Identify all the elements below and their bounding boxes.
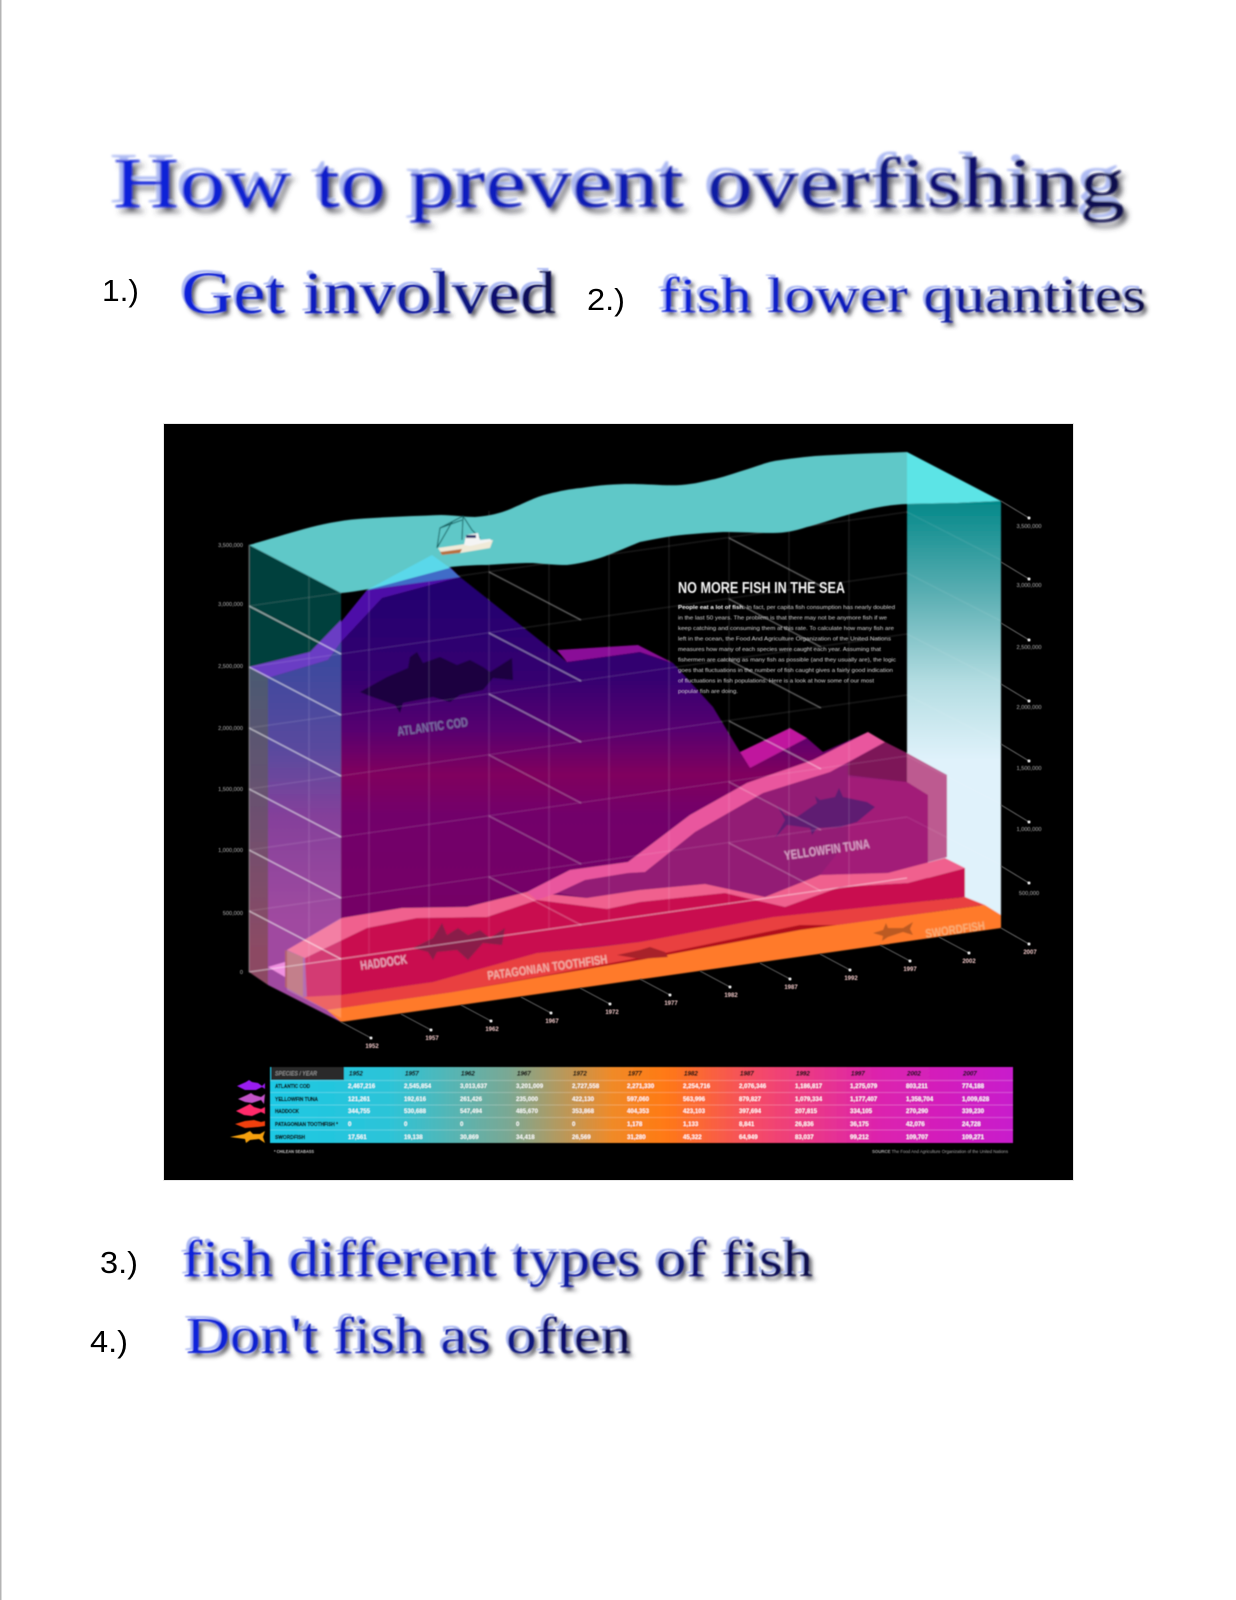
row: atlantic cod: ATLANTIC COD <box>275 1084 310 1090</box>
right wall <box>907 501 1001 916</box>
text block: no more fish in the sea: keep catching and consuming them at this rate. To calculate how many fish are <box>678 626 894 632</box>
left axis labels <box>218 543 243 976</box>
row: haddock: 334,105 <box>850 1108 873 1115</box>
tip 1 text: Get involved <box>181 260 556 326</box>
data table: 1967 <box>517 1070 531 1078</box>
row: swordfish: 83,037 <box>795 1134 814 1141</box>
row: haddock: 423,103 <box>683 1108 706 1115</box>
data table: 1952 <box>349 1070 363 1078</box>
fish: swordfish <box>873 922 913 941</box>
tip 1 number: 1.) <box>102 273 139 308</box>
year axis: 1957 <box>425 1036 439 1042</box>
3D chart <box>249 452 1001 1022</box>
left axis labels: 3,000,000 <box>218 602 243 608</box>
row: patagonian toothfish <box>275 1121 981 1128</box>
data table: 1992 <box>796 1070 810 1078</box>
row: haddock: 344,755 <box>348 1108 371 1115</box>
grid lines <box>249 460 1001 972</box>
row: patagonian toothfish: 1,178 <box>627 1121 643 1128</box>
row: patagonian toothfish: 0 <box>460 1121 464 1128</box>
right axis ticks and labels: 1,000,000 <box>1017 827 1041 833</box>
row: atlantic cod: 2,254,716 <box>683 1083 711 1090</box>
row: patagonian toothfish: 1,133 <box>683 1121 699 1128</box>
year axis: 1952 <box>365 1044 379 1050</box>
data table: 2002 <box>906 1070 921 1078</box>
right axis ticks and labels: 2,500,000 <box>1017 645 1041 651</box>
right axis ticks and labels: 3,000,000 <box>1017 583 1041 589</box>
year axis: 1972 <box>605 1010 619 1016</box>
row: swordfish: 99,212 <box>850 1134 869 1141</box>
row: yellowfin tuna: 1,177,407 <box>850 1096 878 1103</box>
row: swordfish: 109,271 <box>962 1134 985 1141</box>
row: atlantic cod: 2,545,854 <box>404 1083 432 1090</box>
text block: no more fish in the sea: measures how many of each species were caught each year. Assuming that <box>678 647 882 653</box>
left axis labels: 1,500,000 <box>218 787 243 793</box>
tip 3 number: 3.) <box>100 1245 138 1280</box>
row: yellowfin tuna: 1,009,628 <box>962 1096 990 1103</box>
row: haddock: 485,670 <box>516 1108 539 1115</box>
toothfish band <box>303 897 985 1010</box>
haddock face <box>305 868 965 1000</box>
row: yellowfin tuna: 422,130 <box>572 1096 595 1103</box>
data table: 1982 <box>684 1070 698 1078</box>
row: patagonian toothfish: 42,076 <box>906 1121 925 1128</box>
row: haddock: 547,494 <box>460 1108 483 1115</box>
row: yellowfin tuna <box>275 1096 990 1103</box>
data table <box>270 1067 1013 1143</box>
text block: no more fish in the sea: People eat a lot of fish. In fact, per capita fish consumption has nearly doubled <box>678 605 895 611</box>
row: patagonian toothfish: 0 <box>404 1121 408 1128</box>
data table: 1997 <box>851 1070 865 1078</box>
row: swordfish: 109,707 <box>906 1134 929 1141</box>
row: yellowfin tuna: 121,261 <box>348 1096 371 1103</box>
row: yellowfin tuna: 1,079,334 <box>795 1096 823 1103</box>
tuna face <box>557 742 947 900</box>
year axis: 1982 <box>724 993 738 999</box>
row: yellowfin tuna: 563,996 <box>683 1096 706 1103</box>
tuna top band <box>527 732 885 900</box>
row: swordfish: 45,322 <box>683 1134 702 1141</box>
data table: 1972 <box>573 1070 587 1078</box>
text block: no more fish in the sea: fishermen are catching as many fish as possible (and they usually are), the logic <box>678 658 896 664</box>
water surface <box>249 452 1001 593</box>
left axis labels: 500,000 <box>223 911 243 917</box>
row: patagonian toothfish: PATAGONIAN TOOTHFISH * <box>275 1122 339 1128</box>
row: swordfish: 30,869 <box>460 1134 479 1141</box>
fish: yellowfin tuna <box>775 788 875 838</box>
row: atlantic cod: 2,271,330 <box>627 1083 655 1090</box>
row: swordfish: SWORDFISH <box>275 1135 305 1141</box>
data table: 2007 <box>962 1070 977 1078</box>
data table: 1987 <box>740 1070 754 1078</box>
table footnote: * CHILEAN SEABASS <box>274 1149 314 1154</box>
row: patagonian toothfish: 0 <box>572 1121 576 1128</box>
fish: toothfish <box>617 947 668 959</box>
text block: no more fish in the sea: popular fish are doing. <box>678 689 738 695</box>
label: patagonian toothfish: PATAGONIAN TOOTHFISH <box>486 952 608 983</box>
text block: no more fish in the sea: goes that fluctuations in the number of fish caught gives a fairly good indication <box>678 668 893 674</box>
title: How to prevent overfishing <box>113 143 1125 223</box>
data table: 1977 <box>628 1070 642 1078</box>
right axis ticks and labels: 2,000,000 <box>1017 705 1041 711</box>
row: swordfish: 19,138 <box>404 1134 423 1141</box>
row: yellowfin tuna: 261,426 <box>460 1096 483 1103</box>
row: yellowfin tuna: 1,358,704 <box>906 1096 934 1103</box>
right axis ticks and labels <box>1001 501 1041 944</box>
year axis: 1962 <box>485 1027 499 1033</box>
row: swordfish <box>275 1134 985 1141</box>
label: atlantic cod: ATLANTIC COD <box>396 714 469 739</box>
row: yellowfin tuna: 879,827 <box>739 1096 762 1103</box>
year axis: 2002 <box>962 959 976 965</box>
year axis: 1967 <box>545 1019 559 1025</box>
row: haddock: 270,290 <box>906 1108 929 1115</box>
data table: 1957 <box>405 1070 419 1078</box>
data table: SPECIES / YEAR <box>275 1070 317 1078</box>
row: haddock: 530,688 <box>404 1108 427 1115</box>
panel: overfishing chart <box>163 423 1074 1181</box>
year axis: 1987 <box>784 985 798 991</box>
left axis labels: 3,500,000 <box>218 543 243 549</box>
year axis: 1977 <box>664 1001 678 1007</box>
row: swordfish: 26,569 <box>572 1134 591 1141</box>
cod top band and face <box>341 567 928 1010</box>
row: patagonian toothfish: 26,836 <box>795 1121 814 1128</box>
row: haddock: 353,868 <box>572 1108 595 1115</box>
left axis labels: 2,000,000 <box>218 726 243 732</box>
year axis: 1992 <box>844 976 858 982</box>
year axis <box>341 937 1037 1050</box>
row: haddock <box>275 1108 985 1115</box>
row: swordfish: 31,280 <box>627 1134 646 1141</box>
swordfish floor <box>327 905 1001 1022</box>
row: patagonian toothfish: 0 <box>516 1121 520 1128</box>
row: atlantic cod: 803,211 <box>906 1083 928 1090</box>
row: yellowfin tuna: 597,060 <box>627 1096 650 1103</box>
text block: no more fish in the sea: left in the ocean, the Food And Agriculture Organization of the United Nations <box>678 637 891 643</box>
right axis ticks and labels: 1,500,000 <box>1017 766 1041 772</box>
row: patagonian toothfish: 24,728 <box>962 1121 981 1128</box>
row: patagonian toothfish: 8,841 <box>739 1121 755 1128</box>
row: atlantic cod: 1,186,817 <box>795 1083 823 1090</box>
row: atlantic cod: 3,013,637 <box>460 1083 488 1090</box>
tip 3 text: fish different types of fish <box>182 1231 813 1288</box>
row: swordfish: 64,949 <box>739 1134 758 1141</box>
row: haddock: 207,815 <box>795 1108 818 1115</box>
row: atlantic cod: 2,076,346 <box>739 1083 767 1090</box>
tip 4 number: 4.) <box>90 1324 128 1359</box>
data table: 1962 <box>461 1070 475 1078</box>
row: yellowfin tuna: YELLOWFIN TUNA <box>275 1097 318 1103</box>
label: haddock: HADDOCK <box>359 952 408 973</box>
year axis: 1997 <box>903 967 917 973</box>
row: yellowfin tuna: 192,616 <box>404 1096 427 1103</box>
haddock top band <box>287 858 965 958</box>
row: atlantic cod: 2,727,558 <box>572 1083 600 1090</box>
fishing boat <box>437 516 493 555</box>
left wall <box>249 545 341 1022</box>
tip 2 text: fish lower quantites <box>659 267 1146 323</box>
tip 4 text: Don't fish as often <box>186 1308 631 1365</box>
row: atlantic cod: 3,201,009 <box>516 1083 544 1090</box>
text block: no more fish in the sea: of fluctuations in fish populations. Here is a look at how some of our most <box>678 678 875 684</box>
text block: no more fish in the sea: NO MORE FISH IN THE SEA <box>678 580 845 597</box>
row: haddock: 404,353 <box>627 1108 650 1115</box>
small pink marker <box>268 962 285 977</box>
row: haddock: 339,230 <box>962 1108 985 1115</box>
row: atlantic cod <box>275 1083 985 1090</box>
row: patagonian toothfish: 36,175 <box>850 1121 869 1128</box>
label: swordfish: SWORDFISH <box>924 919 986 941</box>
wall sheen <box>287 918 341 1018</box>
row: atlantic cod: 2,467,216 <box>348 1083 376 1090</box>
text block: no more fish in the sea: in the last 50 years. The problem is that there may not be anymore fish if we <box>678 616 887 622</box>
left page edge <box>0 0 2 1600</box>
table source: SOURCE The Food And Agriculture Organization of the United Nations <box>872 1149 1009 1154</box>
fish: atlantic cod <box>360 652 513 713</box>
toothfish dark strip <box>453 925 853 992</box>
tuna left block <box>285 950 303 997</box>
row: haddock: HADDOCK <box>275 1109 299 1115</box>
year axis: 2007 <box>1023 950 1037 956</box>
row: haddock: 397,694 <box>739 1108 762 1115</box>
row: patagonian toothfish: 0 <box>348 1121 352 1128</box>
left axis labels: 1,000,000 <box>218 848 243 854</box>
text block: no more fish in the sea <box>678 580 896 695</box>
row: atlantic cod: 774,188 <box>962 1083 985 1090</box>
row: swordfish: 17,561 <box>348 1134 367 1141</box>
tip 2 number: 2.) <box>587 282 625 317</box>
left axis labels: 2,500,000 <box>218 664 243 670</box>
label: yellowfin tuna: YELLOWFIN TUNA <box>783 836 871 863</box>
fish: haddock <box>413 923 505 960</box>
right axis ticks and labels: 500,000 <box>1019 891 1039 897</box>
row: yellowfin tuna: 235,000 <box>516 1096 539 1103</box>
right axis ticks and labels: 3,500,000 <box>1017 524 1041 530</box>
row: atlantic cod: 1,275,079 <box>850 1083 878 1090</box>
row: swordfish: 34,418 <box>516 1134 535 1141</box>
left axis labels: 0 <box>240 970 243 976</box>
table fish icons <box>230 1080 265 1143</box>
